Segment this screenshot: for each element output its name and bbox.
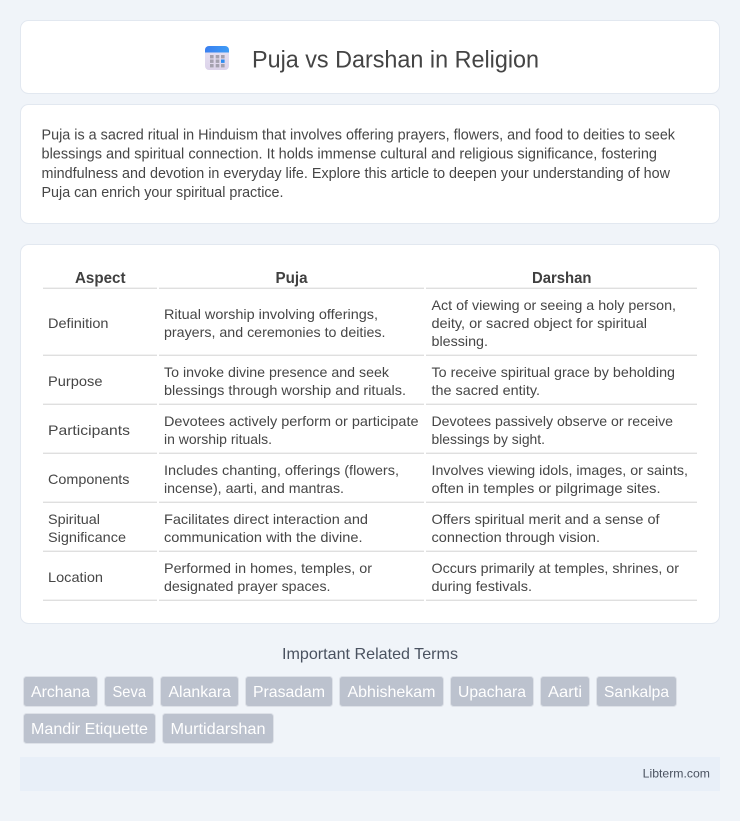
- table row: spiritual significance: Facilitates direct interaction and: [164, 511, 368, 527]
- table row: purpose: To invoke divine presence and seek: [164, 364, 390, 380]
- table row: participants: [48, 413, 673, 447]
- table row: spiritual significance: [48, 511, 660, 545]
- tag: Seva: [104, 676, 154, 706]
- tag: Murtidarshan: Murtidarshan: [170, 721, 266, 738]
- table row: components: Components: [48, 471, 130, 487]
- table row: spiritual significance: Significance: [48, 529, 126, 545]
- table row: components: [48, 462, 688, 496]
- table row: components: often in temples or pilgrimage sites.: [432, 480, 660, 496]
- table row: purpose: Purpose: [48, 373, 103, 389]
- table row: participants: blessings by sight.: [432, 431, 545, 447]
- table row: location: Location: [48, 569, 103, 585]
- table row: components: Includes chanting, offerings (flowers,: [164, 462, 399, 478]
- table row: definition: Definition: [48, 315, 108, 331]
- table header row: Aspect: [75, 270, 126, 287]
- table row: definition: blessing.: [432, 333, 488, 349]
- table row: spiritual significance: Offers spiritual merit and a sense of: [432, 511, 660, 527]
- tag: Archana: [24, 676, 98, 706]
- table header row: Puja: [276, 270, 308, 287]
- tag: Seva: Seva: [112, 684, 146, 701]
- table header row: Darshan: [532, 270, 592, 287]
- text block: intro paragraph: Puja is a sacred ritual in Hinduism that involves offering prayers, flowers, and food to deities to seek: [42, 128, 676, 144]
- footer credit: Libterm.com: [643, 766, 710, 780]
- related term tags: [24, 676, 676, 744]
- panel: introduction: [20, 104, 720, 224]
- heading: important related terms: Important Related Terms: [282, 646, 458, 663]
- tag: Abhishekam: Abhishekam: [348, 684, 436, 701]
- footer: [20, 757, 720, 791]
- tag: Aarti: [540, 676, 590, 706]
- table row: purpose: To receive spiritual grace by beholding: [432, 364, 675, 380]
- table row: components: incense), aarti, and mantras.: [164, 480, 344, 496]
- text block: intro paragraph: Puja can enrich your spiritual practice.: [42, 185, 284, 201]
- table row: spiritual significance: Spiritual: [48, 511, 100, 527]
- table row: definition: [48, 297, 676, 349]
- table row: location: [48, 560, 679, 594]
- table row: definition: prayers, and ceremonies to deities.: [164, 324, 386, 340]
- table row: location: during festivals.: [432, 578, 532, 594]
- table row: participants: Devotees actively perform or participate: [164, 413, 419, 429]
- text block: intro paragraph: [42, 128, 676, 201]
- panel: title header: [20, 20, 720, 94]
- text block: intro paragraph: mindfulness and devotion in everyday life. Explore this article to deepen your understanding of how: [42, 166, 671, 182]
- table header row: [75, 270, 592, 287]
- tag: Sankalpa: [596, 676, 676, 706]
- table row: purpose: blessings through worship and rituals.: [164, 382, 406, 398]
- table row: location: Occurs primarily at temples, shrines, or: [432, 560, 679, 576]
- tag: Murtidarshan: [162, 714, 274, 744]
- table row: components: Involves viewing idols, images, or saints,: [432, 462, 688, 478]
- tag: Alankara: [160, 676, 238, 706]
- table row: purpose: the sacred entity.: [432, 382, 540, 398]
- table row: definition: deity, or sacred object for spiritual: [432, 315, 647, 331]
- table row: spiritual significance: connection through vision.: [432, 529, 600, 545]
- panel: comparison table: [20, 244, 720, 624]
- tag: Archana: Archana: [31, 684, 90, 701]
- tag: Mandir Etiquette: [24, 714, 156, 744]
- tag: Aarti: Aarti: [548, 684, 582, 701]
- icon: calendar: [205, 46, 229, 70]
- tag: Upachara: Upachara: [458, 684, 526, 701]
- table row: location: Performed in homes, temples, or: [164, 560, 372, 576]
- table row: participants: Participants: [48, 422, 130, 438]
- table row: purpose: [48, 364, 675, 398]
- table row: location: designated prayer spaces.: [164, 578, 330, 594]
- tag: Upachara: [450, 676, 534, 706]
- tag: Abhishekam: [340, 676, 444, 706]
- tag: Prasadam: Prasadam: [253, 684, 325, 701]
- text block: intro paragraph: blessings and spiritual connection. It holds immense cultural and religious significance, fostering: [42, 146, 657, 162]
- table row: definition: Ritual worship involving offerings,: [164, 306, 378, 322]
- title: Puja vs Darshan in Religion: [252, 46, 539, 74]
- table row: spiritual significance: communication with the divine.: [164, 529, 362, 545]
- table row: definition: Act of viewing or seeing a holy person,: [432, 297, 676, 313]
- tag: Sankalpa: Sankalpa: [604, 684, 669, 701]
- table row: participants: in worship rituals.: [164, 431, 272, 447]
- table row: participants: Devotees passively observe or receive: [432, 413, 673, 429]
- tag: Prasadam: [246, 676, 332, 706]
- tag: Alankara: Alankara: [168, 684, 231, 701]
- tag: Mandir Etiquette: Mandir Etiquette: [31, 721, 148, 738]
